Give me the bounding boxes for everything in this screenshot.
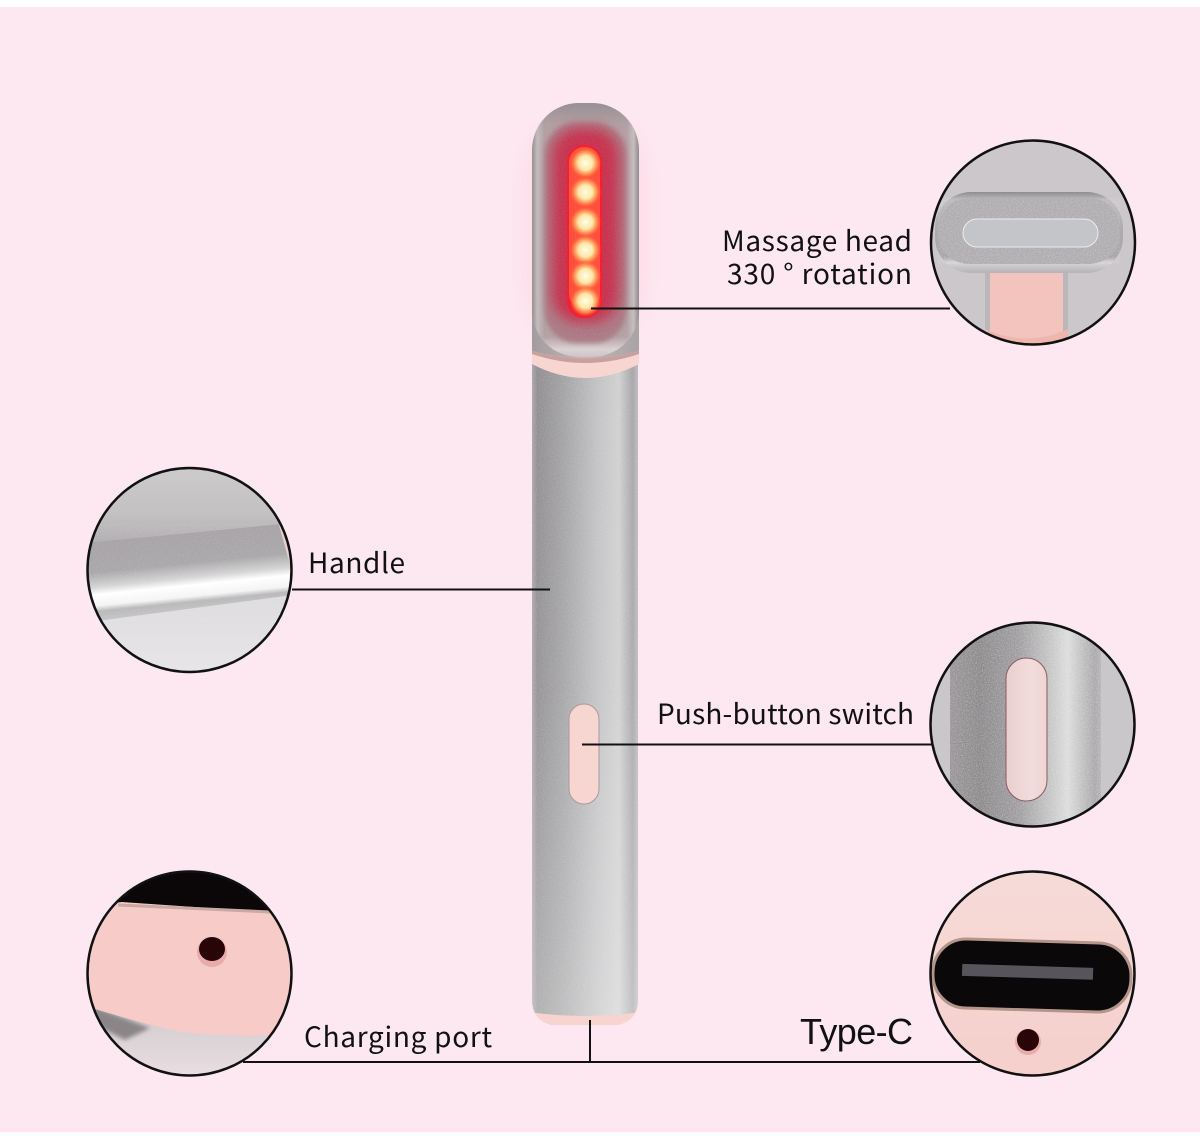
label: massage head <box>722 220 912 293</box>
detail circle: push-button switch <box>928 620 1138 830</box>
label: Type-C: Type-C <box>800 1011 913 1052</box>
rotating massage head <box>532 103 639 357</box>
detail circle: Type-C port <box>928 869 1138 1079</box>
detail circle: massage head <box>930 140 1136 350</box>
LED lights <box>570 147 602 317</box>
label: massage head: 330 ° rotation <box>727 253 912 293</box>
LED strip <box>567 145 602 318</box>
stem <box>985 273 1068 344</box>
label: push-button switch: Push-button switch <box>657 693 914 733</box>
metal tube <box>85 523 292 622</box>
head glow <box>528 120 643 340</box>
label: massage head: Massage head <box>722 220 912 260</box>
pink end cap <box>535 1012 635 1025</box>
pink button <box>1006 658 1047 801</box>
label: charging port: Charging port <box>304 1016 492 1056</box>
detail circle: handle <box>85 466 296 676</box>
push-button <box>569 704 599 804</box>
indicator hole <box>197 937 227 967</box>
silver pill <box>935 192 1123 273</box>
callout: massage head line <box>591 308 950 310</box>
shadow under body <box>95 1009 150 1042</box>
neck behind head <box>532 310 639 359</box>
contact tongue <box>962 964 1093 980</box>
metal surface <box>950 620 1101 830</box>
callout: handle line <box>292 588 550 590</box>
light window <box>963 219 1098 247</box>
wand device <box>528 103 643 1030</box>
label: handle: Handle <box>308 542 405 582</box>
pink sliver <box>279 525 290 564</box>
USB-C socket <box>932 938 1132 1013</box>
indicator hole <box>1015 1029 1041 1055</box>
callout: charging and type-c lines <box>243 1020 980 1062</box>
detail circle: charging port <box>85 869 295 1080</box>
callout: push-button line <box>582 744 932 746</box>
pink collar <box>532 351 639 378</box>
wand handle body <box>528 350 642 1030</box>
pink body <box>85 902 295 1036</box>
